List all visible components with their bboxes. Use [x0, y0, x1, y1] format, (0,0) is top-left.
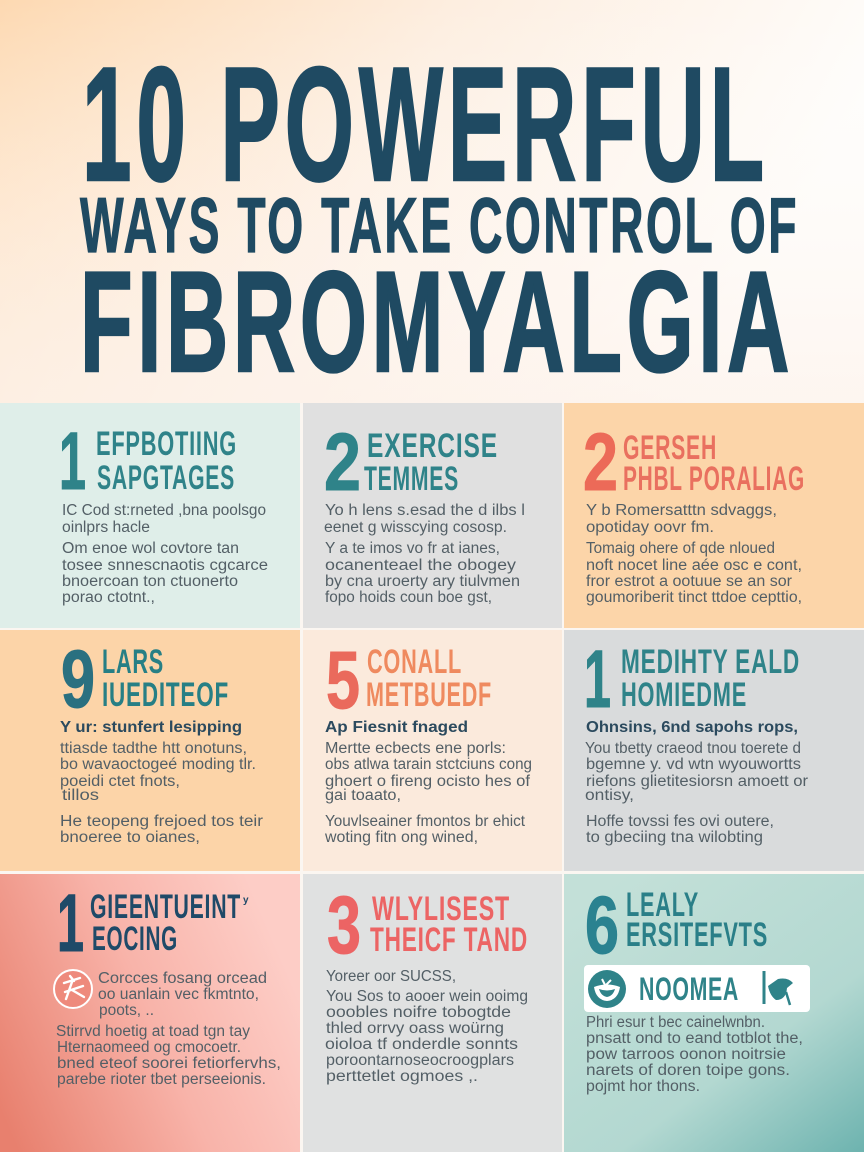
- body text: pnsatt ond to eand totblot the,: [586, 1030, 803, 1047]
- heading: [370, 890, 528, 959]
- body text: ttiasde tadthe htt onotuns,: [60, 740, 247, 757]
- panel: tip 5: [303, 630, 562, 871]
- body text: bnoeree to oianes,: [60, 829, 200, 846]
- heading: GERSEH: [623, 429, 717, 467]
- body text: Youvlseainer fmontos br ehict: [325, 813, 526, 830]
- body text: to gbeciing tna wilobting: [586, 829, 763, 846]
- heading: METBUEDF: [366, 676, 492, 714]
- heading: TEMMES: [364, 460, 459, 498]
- heading: [623, 429, 805, 498]
- body text: goumoriberit tinct ttdoe cepttio,: [586, 589, 802, 606]
- body text: [62, 502, 268, 606]
- body text: narets of doren toipe gons.: [586, 1062, 790, 1079]
- subheading: Ohnsins, 6nd sapohs rops,: [586, 719, 798, 736]
- body text: poroontarnoseocroogplars: [326, 1052, 514, 1069]
- body text: You tbetty craeod tnou toerete d: [585, 740, 801, 757]
- body text: [324, 502, 525, 606]
- body text: opotiday oovr fm.: [586, 519, 714, 536]
- heading: EXERCISE: [367, 427, 498, 465]
- body text: ghoert o fireng ocisto hes of: [325, 773, 531, 790]
- number 6: 6: [585, 880, 619, 971]
- heading: IUEDITEOF: [102, 676, 229, 714]
- body text: by cna uroerty ary tiulvmen: [325, 573, 520, 590]
- panel: tip 9: [564, 874, 864, 1152]
- body text: [586, 502, 802, 606]
- icon: leaf and stem: [764, 971, 793, 1005]
- panel: tip 6: [564, 630, 864, 871]
- heading: [102, 643, 229, 714]
- body text: [60, 740, 263, 846]
- heading: HOMIEDME: [621, 676, 747, 714]
- heading: EOCING: [92, 920, 178, 958]
- header background: [0, 0, 864, 403]
- body text: Phri esur t bec cainelwnbn.: [586, 1014, 765, 1031]
- heading: GIEENTUEINT: [90, 888, 241, 926]
- panel: tip 4: [0, 630, 300, 871]
- body text: tillos: [62, 787, 99, 804]
- body text: fopo hoids coun boe gst,: [325, 589, 492, 606]
- body text: oioloa tf onderdle sonnts: [325, 1036, 518, 1053]
- number 5: 5: [326, 635, 360, 726]
- heading: EFPBOTIING: [96, 425, 237, 463]
- heading: [364, 427, 498, 498]
- callout: white label box: [584, 965, 810, 1012]
- subheading: Y ur: stunfert lesipping: [60, 719, 242, 736]
- body text: You Sos to aooer wein ooimg: [326, 988, 528, 1005]
- heading: y: [243, 895, 249, 906]
- panel: tip 8: [303, 874, 562, 1152]
- body text: ooobles noifre tobogtde: [326, 1004, 511, 1021]
- body text: porao ctotnt.,: [62, 589, 155, 606]
- body text: Stirrvd hoetig at toad tgn tay: [56, 1023, 250, 1040]
- heading: [90, 888, 249, 958]
- body text: tosee snnescnaotis cgcarce: [62, 557, 268, 574]
- heading: WLYLISEST: [372, 890, 510, 928]
- body text: [56, 1023, 281, 1088]
- body text: [585, 740, 808, 846]
- body text: Om enoe wol covtore tan: [62, 540, 239, 557]
- body text: ontisy,: [585, 787, 634, 804]
- body text: Yoreer oor SUCSS,: [326, 968, 456, 985]
- body text: Yo h lens s.esad the d ilbs l: [325, 502, 525, 519]
- number 1: 1: [59, 416, 86, 507]
- body text: bgemne y. vd wtn wyouwortts: [586, 756, 801, 773]
- heading: LEALY: [626, 886, 699, 924]
- body text: obs atlwa tarain stctciuns cong: [325, 756, 532, 773]
- number 2: 2: [324, 417, 361, 508]
- label text: NOOMEA: [639, 971, 739, 1007]
- body text: [325, 968, 528, 1085]
- body text: riefons glietitesiorsn amoett or: [586, 773, 808, 790]
- number 1 navy: 1: [57, 878, 84, 969]
- heading: [621, 643, 800, 714]
- heading: [96, 425, 237, 497]
- body text: Hternaomeed og cmocoetr.: [57, 1039, 241, 1056]
- body text: He teopeng frejoed tos teir: [60, 813, 263, 830]
- heading: [626, 886, 768, 954]
- body text: Mertte ecbects ene porls:: [325, 740, 506, 757]
- body text: thled orrvy oass woürng: [326, 1020, 504, 1037]
- body text: eenet g wisscying cososp.: [324, 519, 507, 536]
- body text: Y b Romersatttn sdvaggs,: [586, 502, 777, 519]
- body text: poeidi ctet fnots,: [60, 773, 180, 790]
- body text: Y a te imos vo fr at ianes,: [325, 540, 500, 557]
- body text: gai toaato,: [325, 787, 401, 804]
- body text: perttetlet ogmoes ,.: [326, 1068, 478, 1085]
- body text: bnoercoan ton ctuonerto: [62, 573, 238, 590]
- body text: fror estrot a ootuue se an sor: [586, 573, 792, 590]
- body text: parebe rioter tbet perseeionis.: [57, 1071, 266, 1088]
- panel: tip 2: [303, 403, 562, 628]
- panel: tip 3: [564, 403, 864, 628]
- panel: tip 7: [0, 874, 300, 1152]
- number 3: 3: [327, 880, 361, 971]
- body text: ocanenteael the obogey: [325, 557, 516, 574]
- heading: THEICF TAND: [370, 921, 528, 959]
- body text: woting fitn ong wined,: [324, 829, 478, 846]
- body text: noft nocet line aée osc e cont,: [586, 557, 802, 574]
- number 2 coral: 2: [583, 417, 618, 508]
- body text: pow tarroos oonon noitrsie: [586, 1046, 786, 1063]
- number 1: 1: [584, 634, 611, 725]
- icon caption: oo uanlain vec fkmtnto,: [98, 986, 259, 1003]
- heading: [366, 643, 492, 714]
- icon: circle with crossed strokes: [54, 970, 92, 1008]
- title: [80, 34, 799, 402]
- icon caption: Corcces fosang orcead: [98, 970, 267, 987]
- number 9: 9: [61, 634, 95, 725]
- body text: [324, 740, 532, 846]
- heading: SAPGTAGES: [97, 459, 235, 497]
- body text: pojmt hor thons.: [586, 1078, 700, 1095]
- body text: IC Cod st:rneted ,bna poolsgo: [62, 502, 266, 519]
- body text: bned eteof soorei fetiorfervhs,: [57, 1055, 281, 1072]
- heading: CONALL: [367, 643, 462, 681]
- body text: Hoffe tovssi fes ovi outere,: [586, 813, 774, 830]
- icon caption: poots, ..: [99, 1002, 154, 1019]
- icon caption: [98, 970, 267, 1019]
- heading: LARS: [102, 643, 164, 681]
- body text: bo wavaoctogeé moding tlr.: [60, 756, 256, 773]
- icon: bowl: [588, 970, 626, 1008]
- subheading: Ap Fiesnit fnaged: [325, 719, 468, 736]
- panel: tip 1: [0, 403, 300, 628]
- body text: [586, 1014, 803, 1095]
- body text: Tomaig ohere of qde nloued: [586, 540, 775, 557]
- heading: ERSITEFVTS: [626, 916, 768, 954]
- body text: oinlprs hacle: [62, 519, 150, 536]
